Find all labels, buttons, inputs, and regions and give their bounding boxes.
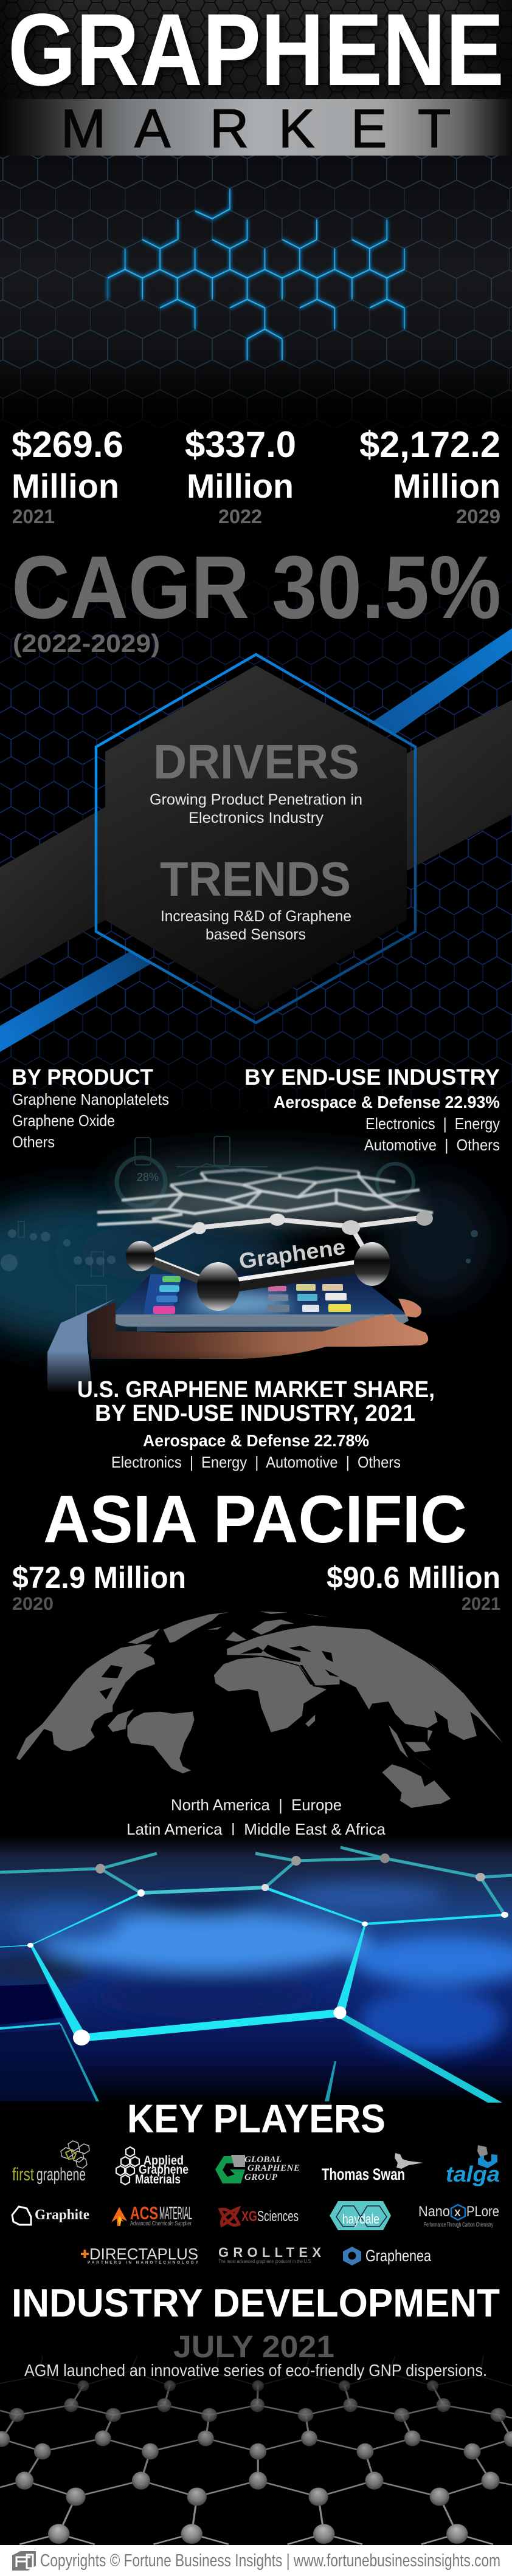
logo: graphite: Graphite	[35, 2207, 89, 2223]
text: driver description	[150, 791, 362, 826]
panel: by product: Graphene Oxide	[12, 1111, 115, 1130]
heading: industry development: INDUSTRY DEVELOPMENT	[12, 2281, 500, 2325]
stat: 2021: Million	[12, 467, 119, 505]
logo: directa plus: PARTNERS IN NANOTECHNOLOGY	[88, 2261, 199, 2265]
panel: by end-use industry: Automotive | Others	[364, 1136, 500, 1154]
heading: key players: KEY PLAYERS	[127, 2096, 386, 2141]
logo: graphenea: Graphenea	[365, 2247, 432, 2265]
logo: global graphene group: GROUP	[244, 2172, 278, 2182]
logo: global graphene group: GRAPHENE	[247, 2163, 300, 2173]
logo: graphenea	[343, 2247, 432, 2265]
market size figures	[12, 424, 500, 527]
back graphene lattice	[97, 1168, 433, 1228]
panel: U.S. market share: Electronics | Energy | Automotive | Others	[111, 1453, 401, 1471]
logo: nanoxplore: X	[454, 2208, 461, 2219]
logo: haydale	[330, 2201, 391, 2230]
panel: by end-use industry: Electronics | Energy	[365, 1115, 500, 1133]
panel: header hexagon texture	[0, 0, 512, 99]
icon: world map globe	[9, 1612, 503, 1808]
logo: nanoxplore: Nano	[418, 2203, 450, 2220]
panel: U.S. market share: U.S. GRAPHENE MARKET SHARE,	[77, 1377, 435, 1403]
logo: first graphene	[12, 2141, 89, 2185]
text: trend description	[161, 908, 351, 943]
graphene molecule bonds	[140, 1217, 426, 1289]
graphene molecule atoms	[126, 1211, 433, 1311]
logo: applied graphene materials: Applied	[144, 2154, 184, 2168]
logo: talga: talga	[446, 2162, 500, 2186]
title bar: Market: MARKET	[61, 98, 451, 159]
heading: drivers: DRIVERS	[153, 735, 359, 789]
stat: Asia Pacific 2021: 2021	[462, 1594, 500, 1614]
logo: ACS material	[111, 2203, 192, 2227]
stat: 2029: Million	[393, 467, 500, 505]
logo: haydale: haydale	[342, 2211, 379, 2227]
stat: 2022	[185, 424, 296, 527]
far hexagon edges	[0, 1847, 512, 1915]
text: development date: JULY 2021	[173, 2329, 334, 2364]
stat: 2022: $337.0	[185, 424, 296, 465]
text: trend description: based Sensors	[206, 926, 306, 943]
stat: 2029	[359, 424, 500, 527]
panel: by product	[12, 1065, 169, 1151]
text: driver description: Growing Product Penetration in	[150, 791, 362, 808]
stat: 2029: 2029	[456, 506, 500, 527]
logo: nanoxplore	[418, 2203, 499, 2228]
panel: footer	[0, 2545, 512, 2576]
logo: XG sciences: Sciences	[257, 2208, 299, 2225]
logo: ACS material: ACS	[130, 2203, 158, 2224]
panel: blue hexagon mesh background	[0, 547, 512, 1124]
stat: 2021: 2021	[12, 506, 55, 527]
logo: talga	[446, 2145, 500, 2186]
hexagon nodes	[27, 1853, 508, 2045]
panel: by product: Graphene Nanoplatelets	[12, 1090, 169, 1108]
decorative blue and grey diagonal bands	[0, 628, 512, 1052]
logo: directa plus: DIRECTAPLUS	[89, 2245, 198, 2263]
text: other regions: North America | Europe	[171, 1796, 342, 1814]
text: other regions	[126, 1796, 386, 1838]
logo: applied graphene materials	[116, 2147, 189, 2186]
logo: XG sciences: XG	[241, 2208, 257, 2225]
panel: company logos	[12, 2141, 500, 2265]
panel: molecular lattice background	[0, 2334, 512, 2545]
logo: nanoxplore: PLore	[466, 2203, 499, 2220]
logo: grolltex: The most advanced graphene producer in the U.S.	[218, 2259, 312, 2264]
panel: U.S. market share: Aerospace & Defense 22.78%	[143, 1431, 369, 1450]
logo: ACS material: Advanced Chemicals Supplier	[130, 2221, 192, 2227]
logo: thomas swan: Thomas Swan	[322, 2165, 405, 2183]
backdrop glow	[0, 1136, 493, 1343]
icon: Fortune Business Insights logo	[12, 2551, 36, 2571]
icon: hand	[36, 1299, 438, 1393]
logo: applied graphene materials: Materials	[135, 2172, 181, 2186]
logo: global graphene group	[215, 2155, 300, 2183]
panel: by end-use industry	[244, 1065, 500, 1154]
stat: 2022: 2022	[218, 506, 262, 527]
panel: glowing blue hexagon floor	[0, 1835, 512, 2104]
logo: XG sciences	[220, 2208, 299, 2225]
stat: Asia Pacific 2020: 2020	[12, 1594, 54, 1614]
logo: first graphene: first	[12, 2165, 34, 2185]
logo: applied graphene materials: Graphene	[139, 2163, 189, 2177]
logo: thomas swan	[322, 2153, 423, 2183]
panel: drivers and trends hexagon	[96, 654, 415, 1023]
heading: trends: TRENDS	[160, 852, 351, 906]
stat: 2029: $2,172.2	[359, 424, 500, 465]
text: other regions: Latin America | Middle East & Africa	[126, 1820, 386, 1838]
logo: grolltex: GROLLTEX	[218, 2245, 321, 2260]
icon: phone	[112, 1274, 409, 1331]
panel: by end-use industry: BY END-USE INDUSTRY	[244, 1065, 500, 1090]
logo: graphite	[12, 2207, 89, 2225]
logo: global graphene group: GLOBAL	[244, 2155, 282, 2165]
stat: 2022: Million	[187, 467, 294, 505]
panel: by product: Others	[12, 1133, 55, 1151]
heading: Asia Pacific: ASIA PACIFIC	[43, 1482, 467, 1557]
panel: smartphone and graphene illustration	[0, 1136, 493, 1393]
heading: CAGR: (2022-2029)	[13, 629, 160, 658]
text: driver description: Electronics Industry	[189, 809, 324, 826]
label: graphene: Graphene	[237, 1234, 347, 1274]
panel: by product: BY PRODUCT	[12, 1065, 153, 1090]
panel: U.S. market share	[77, 1377, 435, 1471]
bright hexagon edges	[0, 1886, 505, 2103]
stat: 2021: $269.6	[12, 424, 123, 465]
stat: Asia Pacific 2020	[12, 1561, 186, 1614]
stat: Asia Pacific 2020: $72.9 Million	[12, 1561, 186, 1595]
panel: glowing hexagon lattice	[0, 156, 512, 435]
text: trend description: Increasing R&D of Graphene	[161, 908, 351, 925]
panel: U.S. market share: BY END-USE INDUSTRY, 2021	[95, 1401, 415, 1426]
panel: by end-use industry: Aerospace & Defense 22.93%	[274, 1093, 500, 1111]
backdrop glow: 28%	[137, 1171, 159, 1183]
stat: Asia Pacific 2021	[327, 1561, 500, 1614]
logo: first graphene: graphene	[36, 2165, 86, 2185]
app icons	[153, 1276, 351, 1314]
stat: Asia Pacific 2021: $90.6 Million	[327, 1561, 500, 1595]
panel: company logos: MATERIAL	[159, 2203, 192, 2224]
stat: 2021	[12, 424, 123, 527]
